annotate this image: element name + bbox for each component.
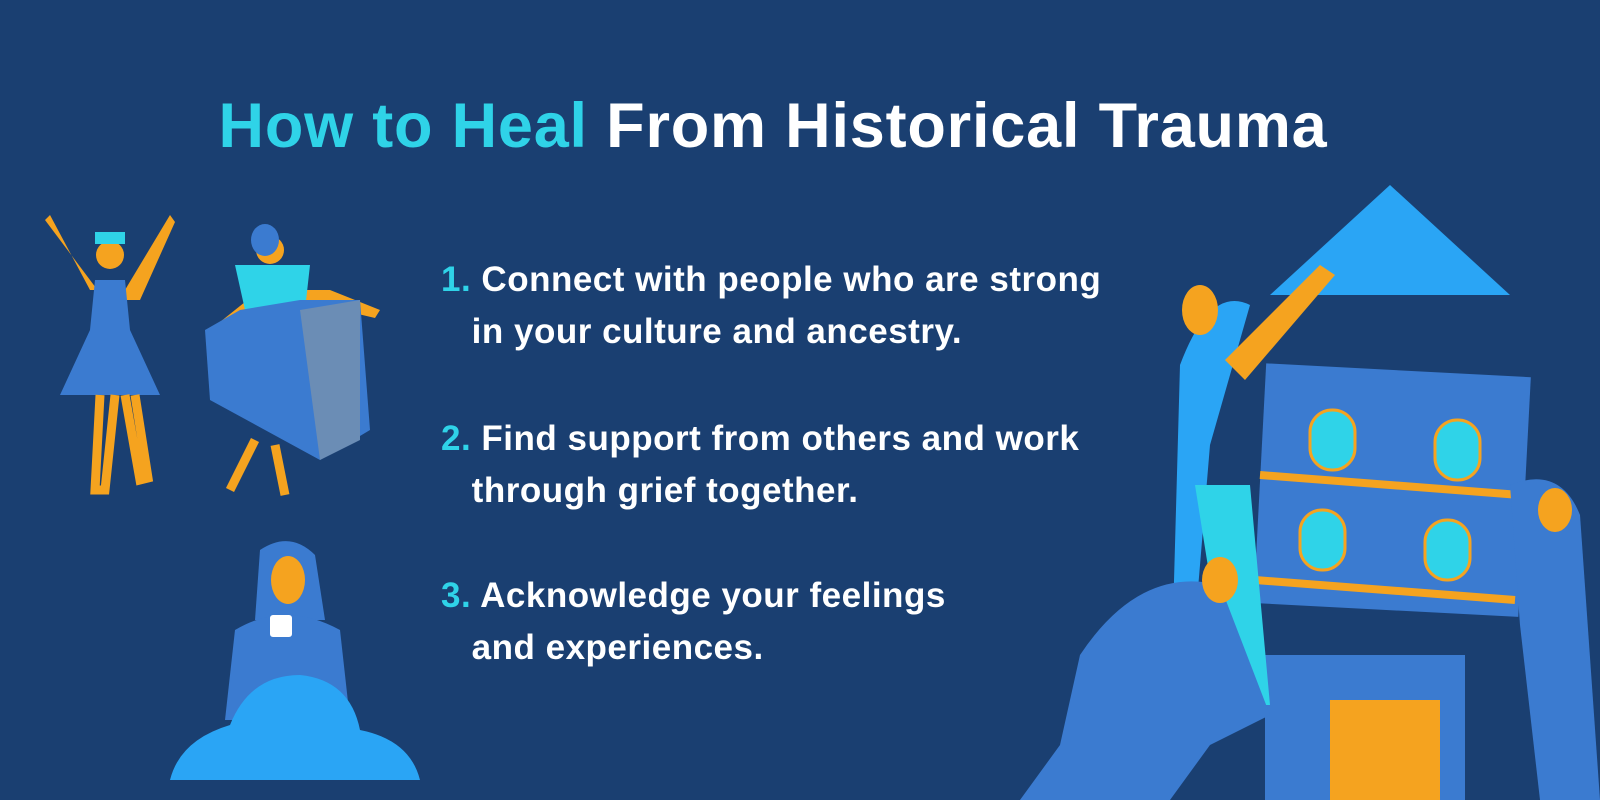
item 2: through grief together.	[472, 471, 858, 510]
illustration: seated woman with mug	[170, 541, 420, 780]
item 2	[441, 419, 1079, 510]
title: How to Heal From Historical Trauma	[219, 91, 1327, 161]
illustration: people building house puzzle	[1020, 185, 1600, 800]
item 1: 1. Connect with people who are strong	[441, 260, 1101, 299]
item 3: 3. Acknowledge your feelings	[441, 576, 946, 615]
item 2: 2. Find support from others and work	[441, 419, 1079, 458]
illustration: dancers	[45, 215, 380, 496]
item 1: in your culture and ancestry.	[472, 312, 962, 351]
item 1	[441, 260, 1101, 351]
item 3: and experiences.	[472, 628, 764, 667]
item 3	[441, 576, 946, 667]
